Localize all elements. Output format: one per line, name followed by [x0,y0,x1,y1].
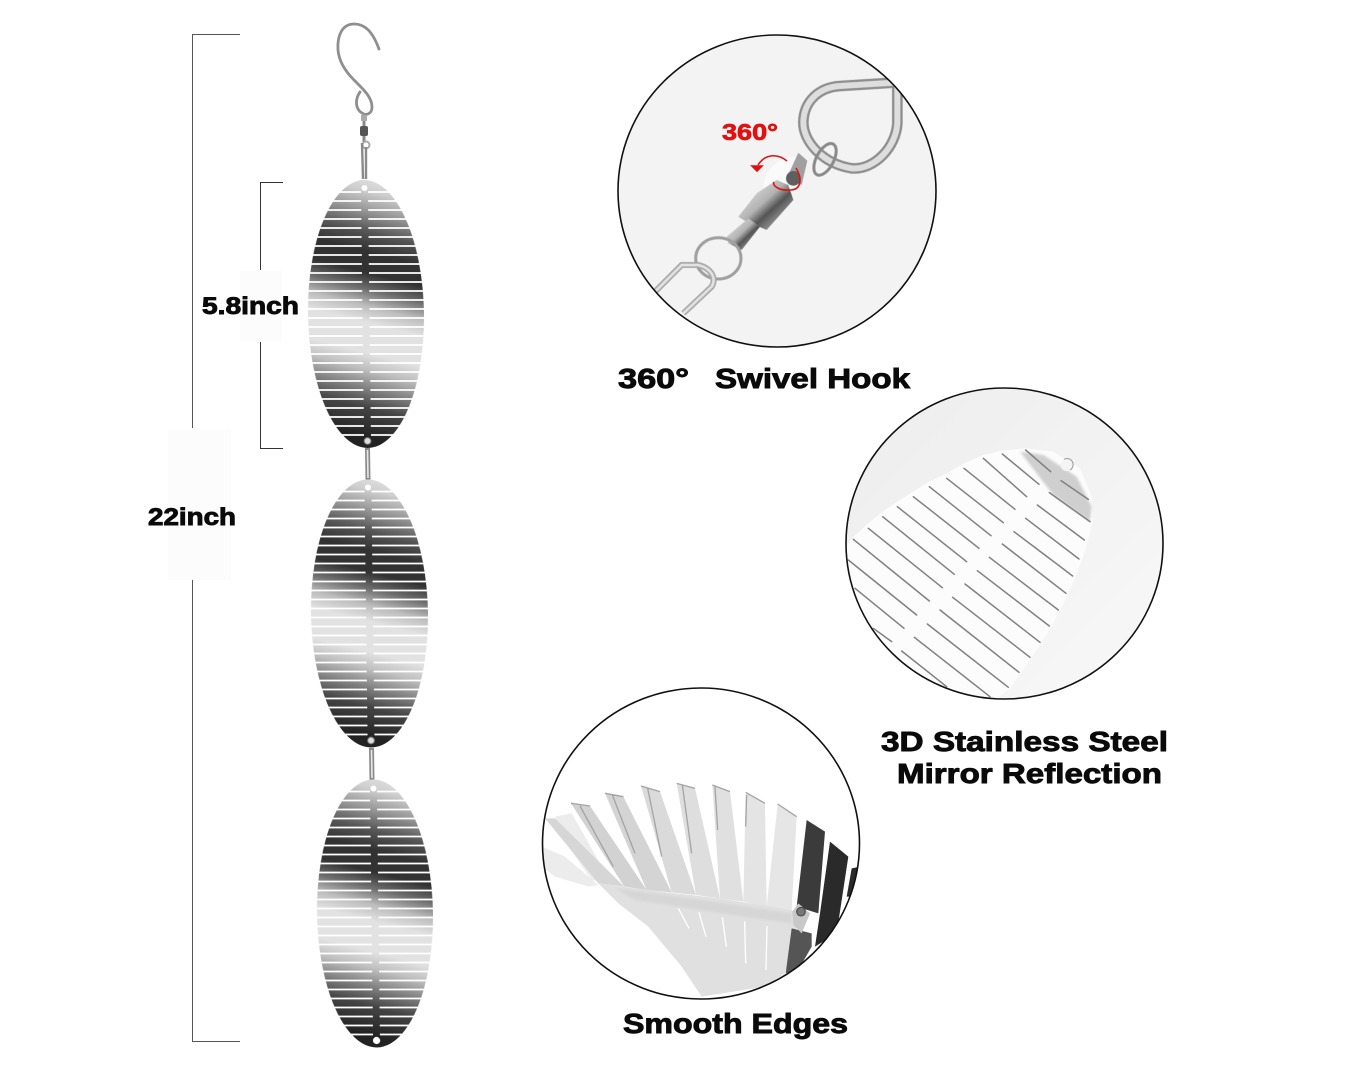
panel: mirror steel detail circle [840,388,1163,703]
caption: 360 swivel hook [618,363,911,394]
dimension: 22 inch total length [148,34,240,1042]
caption: 3D stainless steel mirror reflection: Mirror Reflection [897,758,1162,789]
caption: 360 swivel hook: 360° [618,363,689,394]
icon: red rotation arrow [752,156,800,190]
slivers between lower slats [678,908,767,970]
dark reflective slats on right [786,820,860,973]
curved lower band [598,883,798,997]
caption: smooth edges: Smooth Edges [623,1008,848,1039]
icon: lower rings and snap clip [653,238,741,313]
rivet [792,903,810,933]
fanned slats [545,783,797,910]
icon: small split ring [812,142,838,177]
panel: smooth edges detail circle [542,688,860,999]
icon: teardrop ring [803,83,897,168]
dimension: 5.8 inch single piece [202,182,299,448]
caption: 3D stainless steel mirror reflection [881,726,1168,789]
panel slot lines [848,450,1090,697]
steel panel shape [840,448,1093,703]
slat edge shading [571,783,797,867]
label: 360 degrees in red: 360° [722,119,778,145]
caption: 3D stainless steel mirror reflection: 3D Stainless Steel [881,726,1168,757]
product: bottom reflective panel [309,780,441,1048]
product: connector between middle and bottom panels [369,748,374,780]
back slats far left [544,814,598,886]
label: 5.8inch: 5.8inch [202,293,299,320]
product: top reflective panel [300,180,432,448]
product: hanging S hook and swivel [338,24,379,179]
panel: swivel hook detail circle [618,35,936,347]
label: 22inch: 22inch [148,504,236,531]
icon: ball bearing swivel [727,150,810,250]
caption: 360 swivel hook: Swivel Hook [715,363,911,394]
product: connector between top and middle panels [365,448,370,480]
product: middle reflective panel [304,480,435,748]
